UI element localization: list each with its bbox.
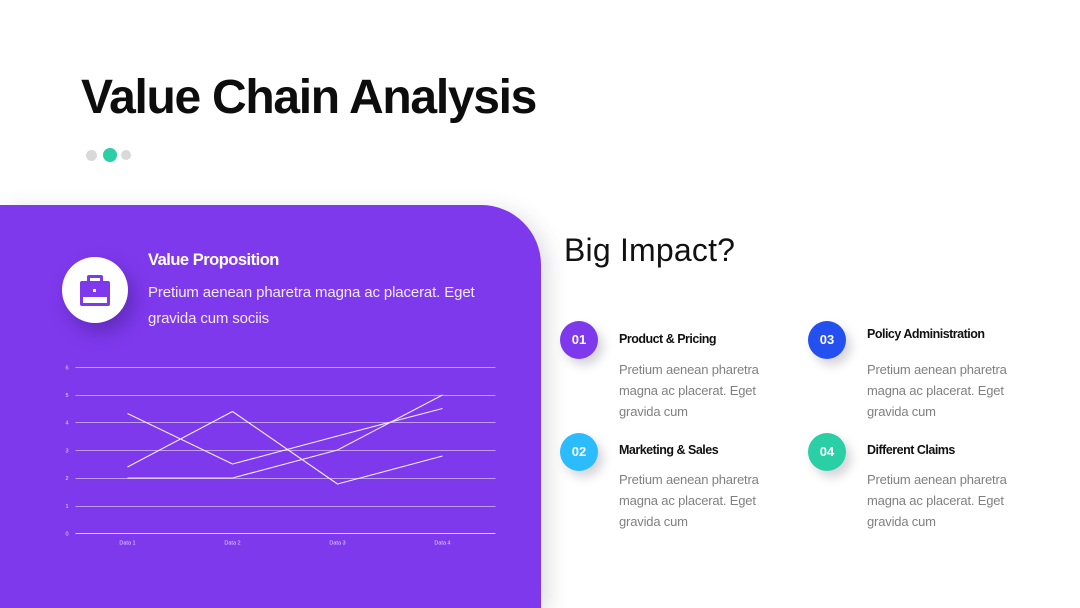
line chart: Data 4 — [434, 540, 451, 546]
pagination dots — [86, 148, 131, 162]
heading 04: Different Claims — [867, 443, 955, 457]
badge 01 — [560, 321, 598, 359]
text 02: Pretium aenean pharetra — [619, 472, 759, 487]
text 04: magna ac placerat. Eget — [867, 493, 1004, 508]
panel heading: Value Proposition — [148, 251, 279, 269]
line chart: 4 — [65, 420, 69, 426]
line chart: 2 — [65, 476, 69, 482]
line chart: Data 3 — [329, 540, 346, 546]
item 03 — [808, 321, 1007, 419]
heading 03: Policy Administration — [867, 327, 985, 341]
text 03: Pretium aenean pharetra — [867, 362, 1007, 377]
heading 02: Marketing & Sales — [619, 443, 718, 457]
text 04: gravida cum — [867, 514, 936, 529]
text 03: gravida cum — [867, 404, 936, 419]
panel: value proposition — [0, 205, 541, 608]
line chart — [65, 366, 496, 546]
section heading: Big Impact? — [564, 232, 735, 268]
text 01 — [619, 362, 759, 419]
item 04 — [808, 433, 1007, 529]
text 01: Pretium aenean pharetra — [619, 362, 759, 377]
line chart: 5 — [65, 393, 69, 399]
badge 04 — [808, 433, 846, 471]
item 02 — [560, 433, 759, 529]
badge 02: 02 — [572, 444, 586, 459]
badge 04: 04 — [820, 444, 834, 459]
line chart: 0 — [65, 532, 69, 538]
line chart: 1 — [65, 504, 69, 510]
line chart: Data 2 — [224, 540, 241, 546]
badge 01: 01 — [572, 332, 586, 347]
panel description: gravida cum sociis — [148, 310, 269, 326]
line chart: Data 1 — [119, 540, 136, 546]
text 03 — [867, 362, 1007, 419]
text 02: magna ac placerat. Eget — [619, 493, 756, 508]
heading 01: Product & Pricing — [619, 332, 716, 346]
text 04 — [867, 472, 1007, 529]
badge 03: 03 — [820, 332, 834, 347]
line chart: 6 — [65, 366, 69, 372]
icon: briefcase — [62, 257, 128, 323]
text 03: magna ac placerat. Eget — [867, 383, 1004, 398]
text 02 — [619, 472, 759, 529]
title: Value Chain Analysis — [81, 71, 536, 124]
panel description: Pretium aenean pharetra magna ac placerat. Eget — [148, 284, 475, 301]
text 01: magna ac placerat. Eget — [619, 383, 756, 398]
text 04: Pretium aenean pharetra — [867, 472, 1007, 487]
line chart: 3 — [65, 448, 69, 454]
item 01 — [560, 321, 759, 419]
badge 02 — [560, 433, 598, 471]
text 02: gravida cum — [619, 514, 688, 529]
text 01: gravida cum — [619, 404, 688, 419]
badge 03 — [808, 321, 846, 359]
panel description — [148, 284, 475, 326]
